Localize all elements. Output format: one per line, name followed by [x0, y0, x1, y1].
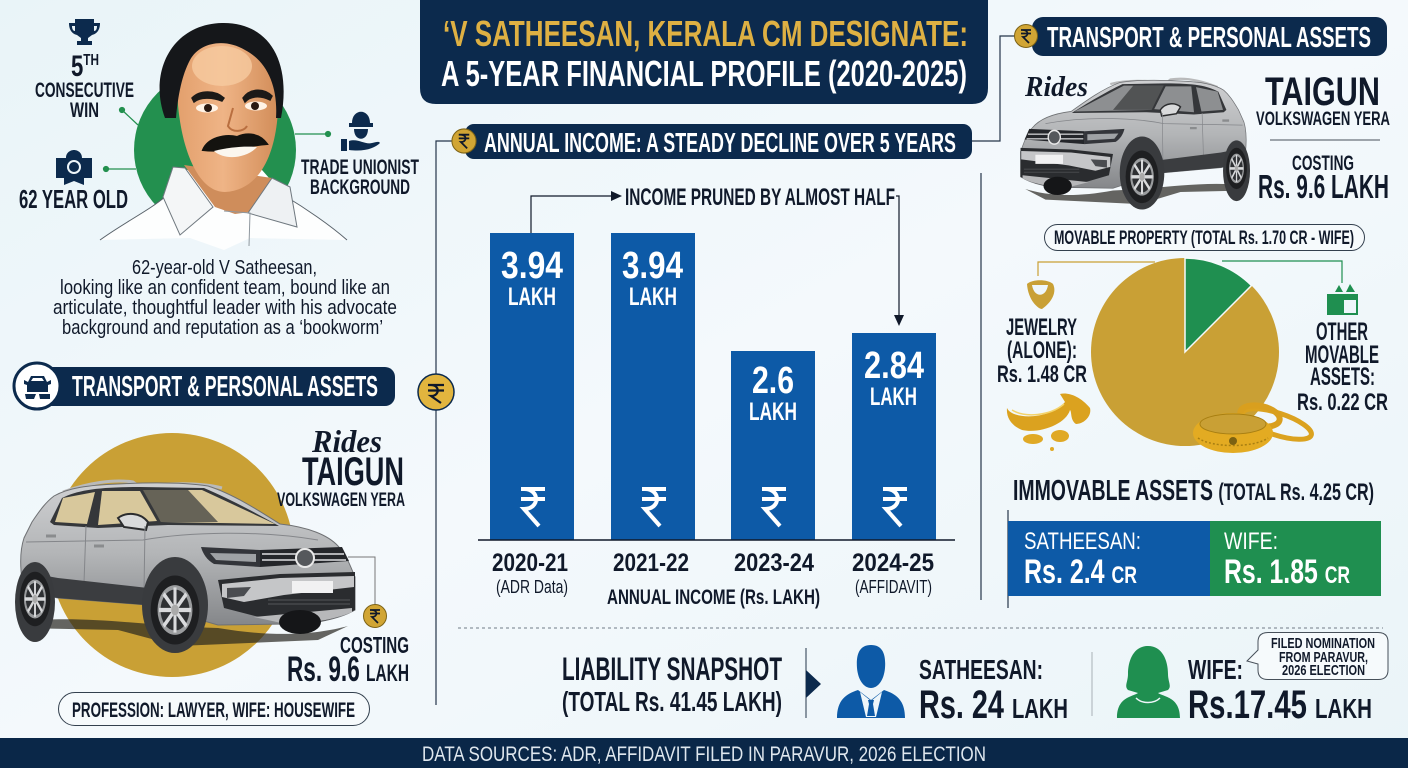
footer: [0, 738, 1408, 768]
large rupee icon: [418, 374, 454, 410]
car panel left: [15, 433, 355, 677]
annotation: income pruned: INCOME PRUNED BY ALMOST HALF: [625, 184, 895, 211]
axis labels: 2023-24: [734, 549, 814, 577]
jewelry label: [997, 280, 1087, 388]
green connectors: [104, 108, 330, 172]
wife share: Rs. 1.85 CR: [1224, 553, 1350, 591]
car name and cost right: COSTING: [1292, 152, 1354, 175]
axis labels: 2020-21: [492, 549, 568, 577]
stat: age: 62 YEAR OLD: [19, 184, 128, 214]
title panel: ‘V SATHEESAN, KERALA CM DESIGNATE:: [443, 13, 968, 54]
annotation: income pruned: [531, 184, 904, 326]
liability snapshot: LIABILITY SNAPSHOT: [562, 651, 782, 687]
cost left: COSTING: [340, 632, 409, 658]
callout: filed nomination: FROM PARAVUR,: [1279, 649, 1368, 666]
icon: gold bangles left: [1007, 394, 1090, 451]
wife share: WIFE:: [1224, 528, 1278, 555]
car name and cost right: [1256, 70, 1390, 205]
satheesan share: Rs. 2.4 CR: [1024, 553, 1137, 591]
liability: satheesan: SATHEESAN:: [919, 654, 1043, 685]
jewelry label: (ALONE):: [1007, 337, 1077, 364]
callout: filed nomination: 2026 ELECTION: [1282, 662, 1365, 679]
liability snapshot: [562, 648, 821, 718]
bar 2024-25: 2.84: [864, 345, 924, 387]
axis labels: (ADR Data): [496, 577, 568, 597]
satheesan share: SATHEESAN:: [1024, 528, 1141, 555]
title panel: [420, 0, 988, 104]
icon: necklace: [1027, 280, 1054, 309]
icon: worker helmet with hand: [341, 112, 380, 151]
biography text: 62-year-old V Satheesan,: [132, 257, 317, 279]
icon: man: [837, 645, 905, 718]
car name left: VOLKSWAGEN YERA: [277, 490, 405, 511]
bar 2020-21: [490, 233, 574, 540]
stat: 5th consecutive win: 5: [71, 50, 88, 83]
biography text: [53, 257, 397, 339]
axis labels: (AFFIDAVIT): [855, 577, 932, 597]
bar 2024-25: LAKH: [870, 383, 917, 411]
cost left: [287, 557, 409, 689]
car illustration: [1021, 79, 1250, 209]
liability snapshot: (TOTAL Rs. 41.45 LAKH): [562, 686, 782, 717]
title panel: A 5-YEAR FINANCIAL PROFILE (2020-2025): [441, 53, 967, 94]
axis labels: [492, 549, 934, 609]
stat: trade unionist: [301, 112, 419, 199]
other assets label: [1297, 284, 1388, 416]
icon: gift: [1327, 284, 1358, 315]
connector lines: [436, 36, 1383, 705]
icon: medal: [56, 150, 92, 185]
bar 2020-21: 3.94: [501, 245, 563, 287]
profession pill: [58, 692, 370, 726]
icon: woman: [1117, 646, 1180, 718]
icon: gold bangles right: [1193, 402, 1315, 453]
satheesan share: [1008, 521, 1210, 596]
section header: annual income: [452, 124, 972, 159]
pie chart: [1038, 258, 1342, 446]
callout: filed nomination: [1247, 632, 1388, 680]
cost left: Rs. 9.6 LAKH: [287, 650, 409, 689]
liability: wife: Rs.17.45 LAKH: [1188, 683, 1372, 727]
bar 2020-21: LAKH: [508, 283, 556, 311]
stat: 5th consecutive win: TH: [83, 52, 99, 69]
footer: DATA SOURCES: ADR, AFFIDAVIT FILED IN PARAVUR, 2026 ELECTION: [422, 743, 986, 766]
section header: transport left: TRANSPORT & PERSONAL ASSETS: [72, 371, 378, 403]
stat: age: [19, 150, 128, 214]
bar 2021-22: LAKH: [629, 283, 677, 311]
stat: 5th consecutive win: CONSECUTIVE: [35, 79, 134, 102]
car name left: Rides: [311, 423, 382, 459]
liability: satheesan: [837, 645, 1068, 727]
stat: trade unionist: TRADE UNIONIST: [301, 156, 419, 179]
car name left: [277, 423, 405, 511]
stat: 5th consecutive win: [35, 19, 134, 122]
immovable assets: [1008, 475, 1381, 608]
stat: trade unionist: BACKGROUND: [310, 176, 410, 199]
section header: transport left: [14, 363, 395, 409]
icon: car: [24, 376, 51, 399]
portrait panel: [100, 23, 347, 250]
jewelry label: JEWELRY: [1006, 314, 1077, 341]
car panel right: [1021, 71, 1250, 209]
bar 2023-24: 2.6: [752, 360, 794, 402]
bar 2024-25: [852, 333, 936, 540]
car illustration: [15, 481, 355, 653]
other assets label: OTHER: [1316, 318, 1368, 346]
icon: trophy: [69, 19, 100, 45]
liability: satheesan: Rs. 24 LAKH: [919, 683, 1068, 727]
axis labels: 2024-25: [852, 549, 934, 577]
bar 2023-24: LAKH: [749, 398, 797, 426]
jewelry label: Rs. 1.48 CR: [997, 361, 1087, 388]
section header: annual income: ANNUAL INCOME: A STEADY DECLINE OVER 5 YEARS: [484, 127, 956, 158]
bar 2021-22: [611, 233, 695, 540]
axis labels: ANNUAL INCOME (Rs. LAKH): [607, 586, 820, 609]
stat: 5th consecutive win: WIN: [70, 99, 99, 122]
green circle: [134, 69, 296, 231]
bar 2023-24: [731, 351, 815, 540]
liability: wife: [1117, 646, 1372, 727]
biography text: looking like an confident team, bound like an: [60, 277, 390, 299]
biography text: articulate, thoughtful leader with his advocate: [53, 297, 397, 319]
biography text: background and reputation as a ‘bookworm’: [62, 317, 383, 339]
wife share: [1210, 521, 1381, 596]
liability: wife: WIFE:: [1188, 654, 1243, 685]
car name left: TAIGUN: [302, 450, 404, 494]
bar 2021-22: 3.94: [622, 245, 683, 287]
bar chart: [478, 184, 955, 609]
portrait illustration: [100, 23, 347, 250]
axis labels: 2021-22: [613, 549, 689, 577]
car panel right: Rides: [1024, 71, 1088, 103]
profession pill: PROFESSION: LAWYER, WIFE: HOUSEWIFE: [72, 699, 355, 722]
